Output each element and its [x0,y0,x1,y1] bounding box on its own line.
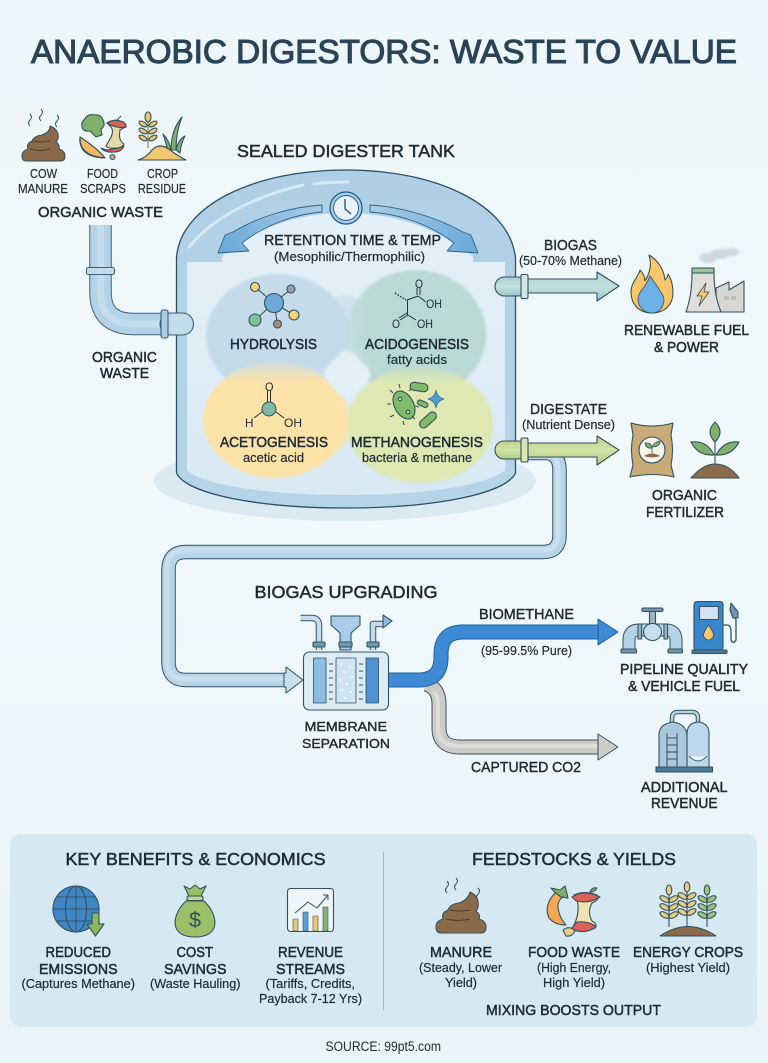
label: digestate: DIGESTATE [530,402,607,418]
icon: food scraps [80,115,126,160]
label: pipeline quality and vehicle fuel [620,661,748,695]
icon: globe with down arrow [53,886,104,936]
label: methanogenesis [351,434,483,465]
source line: SOURCE: 99pt5.com [326,1039,441,1054]
label: additional revenue [641,779,728,812]
arrow into membrane [284,667,303,693]
label: biogas: BIOGAS [544,238,597,254]
label: organic fertilizer: FERTILIZER [646,504,724,521]
label: retention time: RETENTION TIME & TEMP [264,233,441,249]
panel: benefits and feedstocks [10,834,757,1027]
label: organic fertilizer: ORGANIC [652,487,717,504]
label: food waste: High Yield) [543,975,605,990]
label: biomethane: BIOMETHANE [479,607,574,623]
label: biogas [519,238,622,268]
labels: waste types: RESIDUE [138,181,186,196]
icon: cow manure [22,109,65,161]
heading: key benefits: KEY BENEFITS & ECONOMICS [66,849,326,869]
heading: organic waste: ORGANIC WASTE [38,204,163,221]
label: retention time: (Mesophilic/Thermophilic) [274,249,425,264]
label: acidogenesis: ACIDOGENESIS [365,336,469,353]
label: retention time [264,233,441,264]
label: revenue streams: STREAMS [276,961,345,978]
icon: flame [631,255,673,313]
label: energy crops: (Highest Yield) [646,960,730,975]
icon: acidogenesis molecule: O [392,317,400,331]
centre gap [320,347,374,401]
icon: acidogenesis molecule [392,277,442,331]
label: membrane separation: MEMBRANE [304,719,387,734]
icon: acidogenesis molecule: O [415,277,423,291]
label: acidogenesis [365,336,469,367]
label: reduced emissions: (Captures Methane) [22,976,135,991]
labels: waste types: FOOD [87,166,118,181]
label: cost savings: COST [176,944,213,961]
label: cost savings: SAVINGS [164,961,226,978]
label: organic fertilizer [646,487,724,521]
label: digestate: (Nutrient Dense) [522,417,615,432]
label: reduced emissions: REDUCED [46,944,111,961]
icon: methanogenesis bacteria [387,382,444,430]
label: organic waste inlet: ORGANIC [92,349,157,366]
icon: acetogenesis molecule: H [245,416,254,430]
label: renewable fuel and power: RENEWABLE FUEL [624,322,749,339]
label: food waste: FOOD WASTE [528,944,620,961]
icon: acetogenesis molecule [245,380,302,430]
tank ground shadow [154,441,536,521]
label: additional revenue: REVENUE [651,795,718,812]
icon: acidogenesis molecule: OH [426,297,442,311]
label: acidogenesis: fatty acids [387,352,448,367]
label: revenue streams [259,944,362,1006]
label: manure: Yield) [445,975,477,990]
callout: mixing boosts output: MIXING BOOSTS OUTPUT [486,1002,661,1019]
heading: biogas upgrading: BIOGAS UPGRADING [254,582,438,602]
label: revenue streams: REVENUE [278,944,343,961]
label: pipeline quality and vehicle fuel: & VEHICLE FUEL [628,678,740,695]
icon: crop residue [138,112,186,160]
icon: money bag [175,885,215,937]
label: hydrolysis: HYDROLYSIS [230,336,317,353]
panel: digester tank [176,170,516,508]
label: biomethane: (95-99.5% Pure) [481,643,572,658]
title: ANAEROBIC DIGESTORS: WASTE TO VALUE [31,33,737,70]
icon: food waste [547,886,600,936]
icon: pipeline valve [621,608,682,653]
label: methanogenesis: METHANOGENESIS [351,434,483,451]
label: captured co2: CAPTURED CO2 [471,760,581,776]
label: manure [419,944,503,990]
label: biogas: (50-70% Methane) [519,253,622,268]
icon: acidogenesis molecule: OH [417,317,433,331]
labels: waste types: COW [30,166,58,181]
label: additional revenue: ADDITIONAL [641,779,728,796]
label: acetogenesis: ACETOGENESIS [220,434,328,451]
inlet pipe: organic waste [86,225,194,338]
label: digestate [522,402,615,432]
icon: seedling [691,422,739,478]
label: methanogenesis: bacteria & methane [362,450,472,465]
label: manure: (Steady, Lower [419,960,503,975]
icon: money bag: $ [189,909,201,932]
label: biomethane [479,607,574,658]
label: food waste [528,944,620,990]
labels: waste types [18,166,186,196]
retention arrows [218,205,478,253]
process lobes [203,270,493,483]
icon: acetogenesis molecule: O [265,380,274,394]
icon: membrane separation unit [300,615,392,710]
label: organic waste inlet: WASTE [100,365,149,382]
label: revenue streams: Payback 7-12 Yrs) [259,991,362,1006]
heading: feedstocks: FEEDSTOCKS & YIELDS [472,849,676,869]
icon: manure [436,878,486,933]
digestate transfer pipe [167,452,560,680]
labels: waste types: SCRAPS [80,181,126,196]
label: acetogenesis: acetic acid [243,450,304,465]
arrow: captured co2 [426,684,618,760]
label: renewable fuel and power [624,322,749,356]
arrow: biomethane [388,619,618,680]
label: cost savings [150,944,240,991]
icon: revenue chart [288,888,334,932]
icon: clock [330,192,362,224]
dome highlights [189,182,348,247]
label: acetogenesis [220,434,328,465]
arrow: biogas output [495,272,619,301]
icon: storage tanks [656,712,712,772]
label: pipeline quality and vehicle fuel: PIPELINE QUALITY [620,661,748,678]
label: food waste: (High Energy, [537,960,611,975]
tank shell [176,170,516,508]
label: membrane separation: SEPARATION [302,736,390,751]
label: membrane separation [302,719,390,751]
heading: sealed digester tank: SEALED DIGESTER TANK [237,141,455,161]
label: cost savings: (Waste Hauling) [150,976,240,991]
label: revenue streams: (Tariffs, Credits, [266,976,355,991]
label: organic waste inlet [92,349,157,382]
icon: fuel pump [692,602,738,654]
label: energy crops: ENERGY CROPS [633,944,743,961]
tank interior [187,213,505,495]
icon: energy crops [659,882,717,936]
label: manure: MANURE [430,944,492,961]
icon: hydrolysis molecule [249,282,299,328]
arrow: digestate output [495,436,619,465]
icon: acetogenesis molecule: OH [284,416,302,430]
label: renewable fuel and power: & POWER [654,339,719,356]
labels: waste types: CROP [147,166,178,181]
label: reduced emissions [22,944,135,991]
label: energy crops [633,944,743,975]
icon: fertilizer bag [630,423,674,477]
label: reduced emissions: EMISSIONS [39,961,118,978]
labels: waste types: MANURE [18,181,68,196]
icon: power plant [686,248,744,312]
